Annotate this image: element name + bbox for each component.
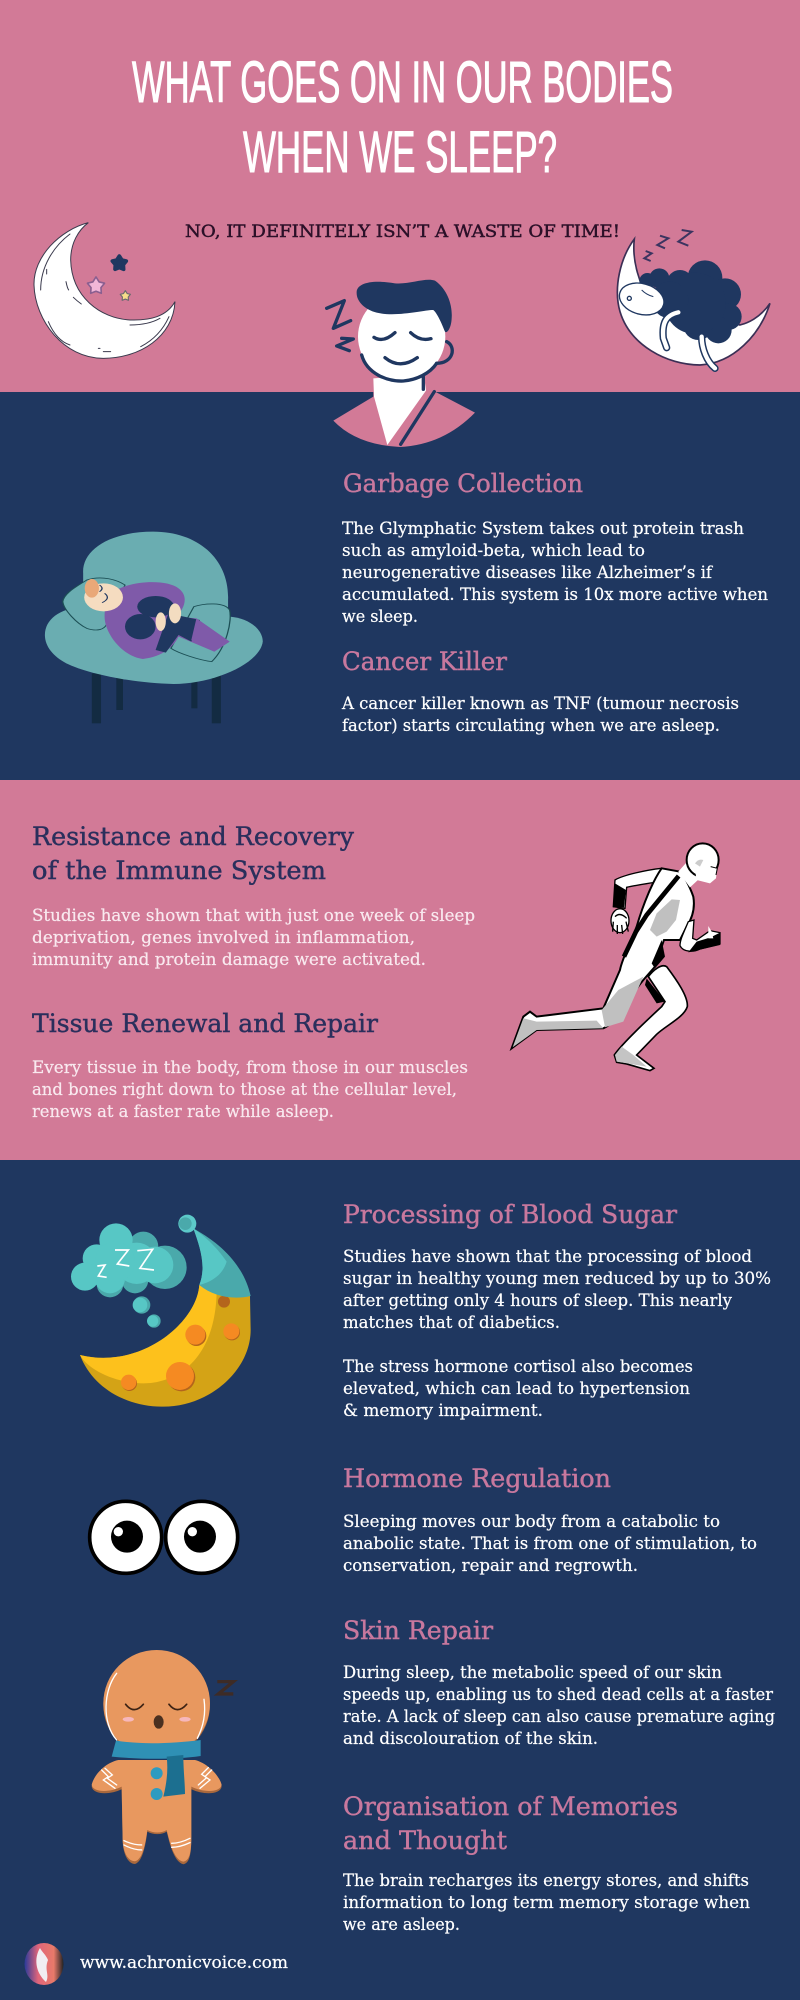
text: skin repair: rate. A lack of sleep can also cause premature aging	[343, 1707, 775, 1727]
text: skin repair: speeds up, enabling us to shed dead cells at a faster	[343, 1685, 774, 1705]
text: sleep deprivation: deprivation, genes involved in inflammation,	[32, 928, 415, 948]
panel: header	[0, 0, 800, 392]
text: glymphatic system: we sleep.	[342, 607, 418, 627]
text: hormone regulation: conservation, repair and regrowth.	[343, 1556, 638, 1576]
text: blood sugar: sugar in healthy young men reduced by up to 30%	[343, 1269, 771, 1289]
heading: organisation of memories: and Thought	[343, 1826, 508, 1856]
text: skin repair	[343, 1663, 775, 1749]
text: glymphatic system: The Glymphatic System takes out protein trash	[342, 519, 744, 539]
text: hormone regulation	[343, 1512, 757, 1576]
footer logo	[24, 1943, 64, 1985]
heading: cancer killer: Cancer Killer	[342, 647, 508, 677]
panel: blood sugar, hormones, skin, memories	[0, 1160, 800, 2000]
illustration: sleeping man	[327, 280, 475, 447]
text: tissue: Every tissue in the body, from those in our muscles	[32, 1058, 468, 1078]
illustration: running figure	[512, 843, 720, 1071]
illustration: yellow moon with nightcap	[71, 1215, 251, 1407]
text: TNF: factor) starts circulating when we are asleep.	[342, 716, 720, 736]
text: blood sugar: matches that of diabetics.	[343, 1313, 560, 1333]
heading: organisation of memories: Organisation of Memories	[343, 1792, 678, 1822]
heading: organisation of memories	[343, 1792, 678, 1856]
subtitle: NO, IT DEFINITELY ISN’T A WASTE OF TIME!	[185, 222, 620, 242]
text: memories: The brain recharges its energy stores, and shifts	[343, 1871, 749, 1891]
illustration: person sleeping on sofa	[45, 532, 263, 723]
text: blood sugar: Studies have shown that the processing of blood	[343, 1247, 752, 1267]
text: cortisol: & memory impairment.	[343, 1401, 543, 1421]
text: glymphatic system: neurogenerative diseases like Alzheimer’s if	[342, 563, 714, 583]
text: cortisol: elevated, which can lead to hypertension	[343, 1379, 690, 1399]
title: WHEN WE SLEEP?	[243, 120, 557, 185]
heading: resistance and recovery	[32, 822, 355, 886]
heading: hormone regulation: Hormone Regulation	[343, 1464, 611, 1494]
text: blood sugar	[343, 1247, 771, 1333]
text: skin repair: and discolouration of the skin.	[343, 1729, 598, 1749]
text: hormone regulation: anabolic state. That is from one of stimulation, to	[343, 1534, 757, 1554]
heading: garbage collection: Garbage Collection	[343, 469, 583, 499]
text: sleep deprivation: Studies have shown that with just one week of sleep	[32, 906, 475, 926]
text: TNF: A cancer killer known as TNF (tumour necrosis	[341, 694, 739, 714]
footer url: www.achronicvoice.com	[80, 1953, 288, 1973]
icon: sheep sleeping on moon	[616, 230, 770, 368]
illustration: sleeping gingerbread man	[92, 1650, 233, 1864]
text: tissue: renews at a faster rate while asleep.	[32, 1102, 334, 1122]
icon: crescent moon with stars	[34, 223, 175, 358]
text: TNF	[341, 694, 739, 736]
heading: tissue renewal: Tissue Renewal and Repair	[32, 1009, 379, 1039]
text: blood sugar: after getting only 4 hours of sleep. This nearly	[343, 1291, 732, 1311]
text: skin repair: During sleep, the metabolic speed of our skin	[343, 1663, 722, 1683]
text: hormone regulation: Sleeping moves our body from a catabolic to	[343, 1512, 720, 1532]
text: sleep deprivation	[32, 906, 475, 970]
text: sleep deprivation: immunity and protein damage were activated.	[32, 950, 426, 970]
text: memories: information to long term memory storage when	[343, 1893, 750, 1913]
text: tissue: and bones right down to those at the cellular level,	[32, 1080, 457, 1100]
text: tissue	[32, 1058, 468, 1122]
text: cortisol: The stress hormone cortisol also becomes	[343, 1357, 693, 1377]
illustration: pair of eyes	[90, 1501, 238, 1573]
title	[132, 50, 673, 185]
panel: garbage collection and cancer killer	[0, 392, 800, 780]
heading: resistance and recovery: Resistance and Recovery	[32, 822, 355, 852]
text: memories: we are asleep.	[343, 1915, 460, 1935]
text: glymphatic system	[342, 519, 768, 627]
text: cortisol	[343, 1357, 693, 1421]
text: memories	[343, 1871, 750, 1935]
heading: resistance and recovery: of the Immune System	[32, 856, 326, 886]
text: glymphatic system: such as amyloid-beta, which lead to	[342, 541, 645, 561]
heading: skin repair: Skin Repair	[343, 1616, 494, 1646]
panel: immune system and tissue repair	[0, 780, 800, 1160]
heading: processing of blood sugar: Processing of Blood Sugar	[343, 1200, 678, 1230]
text: glymphatic system: accumulated. This system is 10x more active when	[342, 585, 768, 605]
